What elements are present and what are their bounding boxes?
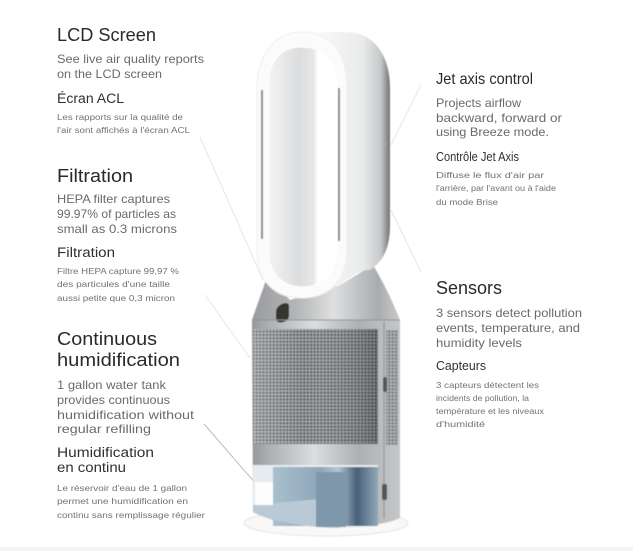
sensor xyxy=(276,303,289,322)
French body: Filtre HEPA capture 99,97 % xyxy=(57,266,179,276)
base plate xyxy=(244,510,408,536)
French body: des particules d'une taille xyxy=(57,279,170,289)
fan loop back xyxy=(300,32,390,297)
heading: Continuous xyxy=(57,329,157,349)
body: 3 sensors detect pollution xyxy=(436,306,582,320)
product: air purifier humidifier xyxy=(244,32,408,536)
heading: Jet axis control xyxy=(436,71,533,88)
body seam xyxy=(383,322,385,518)
French body: aussi petite que 0,3 micron xyxy=(57,293,175,303)
French heading: Écran ACL xyxy=(57,91,124,106)
body: on the LCD screen xyxy=(57,67,162,81)
body: backward, forward or xyxy=(436,111,562,125)
French body: Les rapports sur la qualité de xyxy=(57,112,183,122)
heading: humidification xyxy=(57,350,180,370)
body: 1 gallon water tank xyxy=(57,378,167,392)
French heading: Filtration xyxy=(57,245,115,260)
body xyxy=(436,96,562,139)
callout: jet axis control xyxy=(436,71,562,207)
French body: l'arrière, par l'avant ou à l'aide xyxy=(436,183,556,193)
leader lines xyxy=(200,85,421,492)
French body xyxy=(57,483,205,520)
heading: Sensors xyxy=(436,278,502,298)
body: See live air quality reports xyxy=(57,52,204,66)
body: small as 0.3 microns xyxy=(57,222,177,236)
French heading: Contrôle Jet Axis xyxy=(436,150,519,164)
French body: Diffuse le flux d'air par xyxy=(436,170,544,180)
heading: Filtration xyxy=(57,166,133,186)
French body: 3 capteurs détectent les xyxy=(436,380,539,390)
French body: permet une humidification en xyxy=(57,496,188,506)
French heading: Humidification xyxy=(57,445,154,460)
side slots xyxy=(382,377,387,500)
heading xyxy=(57,329,180,370)
French heading: en continu xyxy=(57,460,126,475)
French body xyxy=(436,170,556,207)
body: humidification without xyxy=(57,408,195,422)
body xyxy=(436,306,582,350)
cylinder body xyxy=(252,320,400,527)
shoulder seam xyxy=(252,319,400,321)
French heading xyxy=(57,445,154,475)
callout: filtration xyxy=(57,166,179,303)
French body xyxy=(57,112,190,135)
ring slots xyxy=(262,88,339,241)
body: regular refilling xyxy=(57,422,151,436)
body shoulder xyxy=(252,265,400,320)
body: events, temperature, and xyxy=(436,321,580,335)
French body: Le réservoir d'eau de 1 gallon xyxy=(57,483,187,493)
French body: continu sans remplissage régulier xyxy=(57,510,205,520)
water tank xyxy=(253,465,378,528)
French body: d'humidité xyxy=(436,419,485,429)
body xyxy=(57,192,177,236)
body: Projects airflow xyxy=(436,96,521,110)
French body xyxy=(436,380,545,429)
body xyxy=(57,52,204,81)
body: humidity levels xyxy=(436,336,522,350)
French body xyxy=(57,266,179,303)
loop opening xyxy=(268,47,337,287)
French body: l'air sont affichés à l'écran ACL xyxy=(57,125,190,135)
body: 99.97% of particles as xyxy=(57,207,176,221)
French body: du mode Brise xyxy=(436,197,498,207)
heading: LCD Screen xyxy=(57,25,156,45)
French heading: Capteurs xyxy=(436,359,486,373)
callout: LCD screen xyxy=(57,25,204,135)
callout: continuous humidification xyxy=(57,329,205,520)
body: HEPA filter captures xyxy=(57,192,170,206)
body xyxy=(57,378,195,436)
French body: incidents de pollution, la xyxy=(436,393,529,403)
side grille xyxy=(386,330,398,445)
body: using Breeze mode. xyxy=(436,125,549,139)
callout: sensors xyxy=(436,278,582,429)
perforated grille xyxy=(253,329,378,444)
fan loop front ring xyxy=(257,32,347,298)
body: provides continuous xyxy=(57,393,170,407)
French body: température et les niveaux xyxy=(436,406,545,416)
